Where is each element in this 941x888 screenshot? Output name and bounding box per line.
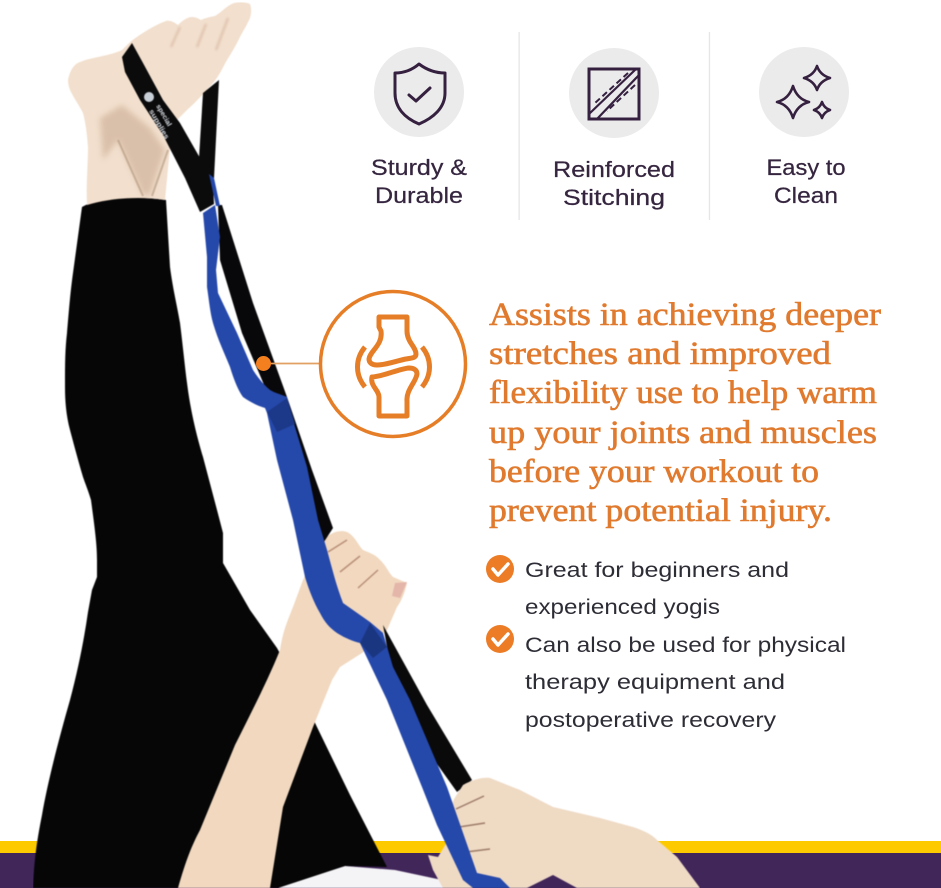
strap logo label: special [154, 104, 172, 128]
label [553, 157, 675, 210]
icon: knee joint in orange circle [320, 292, 466, 436]
right arm and hand holding the strap [178, 531, 407, 888]
heading: orange benefit statement: up your joints and muscles [489, 415, 877, 451]
label: Durable [375, 183, 463, 208]
bullet text: therapy equipment and [525, 670, 785, 694]
bullet text: experienced yogis [525, 595, 720, 619]
icon: orange check [486, 555, 514, 583]
heading: orange benefit statement: prevent potential injury. [489, 493, 832, 529]
heading: orange benefit statement: before your workout to [489, 454, 819, 490]
divider lines between features [518, 32, 710, 220]
label [371, 155, 467, 208]
icon: sparkles [759, 47, 849, 137]
bullet text [525, 558, 789, 619]
lower hand and forearm [428, 778, 700, 888]
heading: orange benefit statement: stretches and improved [489, 336, 832, 372]
label: Reinforced [553, 157, 675, 182]
blue strap stitching patches [267, 398, 295, 432]
photo: woman stretching a leg with the strap [33, 2, 700, 888]
feature: Easy to Clean [759, 47, 849, 208]
footer band: yellow and purple stripes [0, 841, 941, 888]
bullet: physical therapy use [486, 625, 846, 732]
strap logo label: supplies [147, 108, 170, 141]
heading: orange benefit statement: flexibility use to help warm [489, 375, 877, 411]
heading: orange benefit statement: Assists in achieving deeper [489, 297, 881, 333]
feature: Sturdy & Durable [371, 47, 467, 208]
feature: Reinforced Stitching [553, 48, 675, 210]
label: Stitching [563, 185, 665, 210]
strap logo label [144, 92, 172, 141]
heading: orange benefit statement [489, 297, 881, 529]
bullet: great for beginners [486, 555, 789, 619]
bare foot [68, 2, 251, 205]
bullet text: Can also be used for physical [525, 633, 846, 657]
label: Clean [774, 183, 838, 208]
label: Sturdy & [371, 155, 467, 180]
blue strap [203, 205, 510, 888]
bullet text: Great for beginners and [525, 558, 789, 582]
black strap loop around the foot [122, 43, 219, 212]
black strap length [218, 205, 333, 545]
callout: pointer line and dot on the strap [256, 356, 321, 371]
white shirt [278, 866, 450, 888]
icon: stitched square [569, 48, 659, 138]
icon: shield with check [374, 47, 464, 137]
bullet text: postoperative recovery [525, 708, 776, 732]
label: Easy to [766, 155, 846, 180]
label [766, 155, 846, 208]
bullet text [525, 633, 846, 732]
icon: orange check [486, 625, 514, 653]
black leggings [33, 198, 387, 888]
